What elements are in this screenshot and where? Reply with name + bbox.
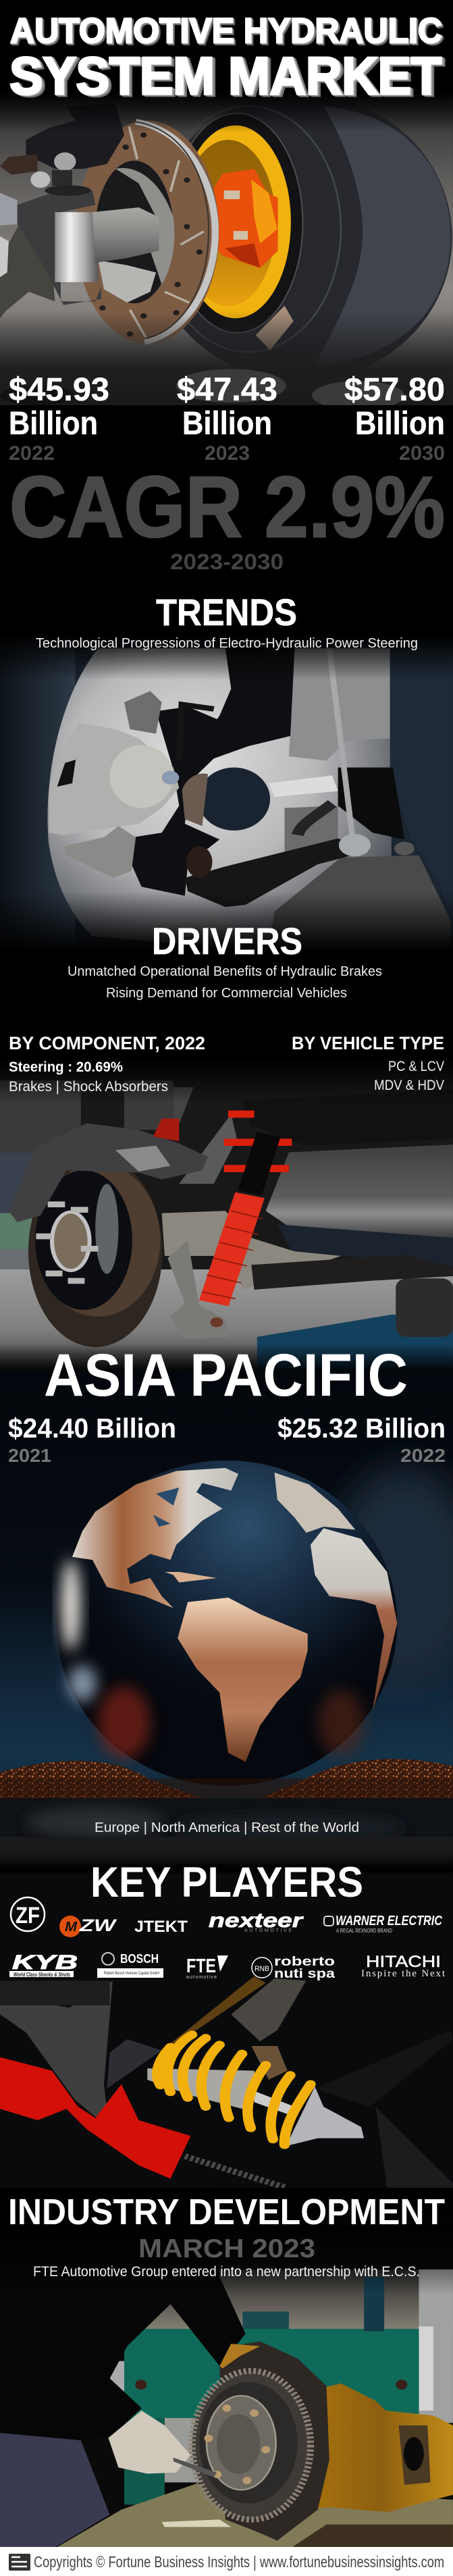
yellow diagonal panel (171, 1976, 266, 2043)
photo: front suspension (0, 635, 453, 952)
logo: KYB: KYB (12, 1951, 78, 1974)
stat: 2022 market value: Billion (9, 406, 98, 442)
worker shirt (0, 2188, 246, 2440)
by component: Steering : 20.69% (9, 1059, 123, 1075)
brake rotor (28, 1156, 162, 1347)
heading: drivers: DRIVERS (152, 920, 302, 962)
teal machine (124, 2329, 419, 2421)
upper strut (213, 648, 294, 759)
gray fairing (0, 1980, 113, 2117)
brake caliper (49, 722, 179, 835)
by component (9, 1033, 205, 1095)
logo: JTEKT: JTEKT (134, 1918, 188, 1936)
stat: 2022 asia pacific (277, 1413, 446, 1466)
stat: 2030 market value: Billion (355, 406, 445, 442)
logo: Warner Electric (324, 1914, 442, 1934)
bench (53, 2483, 453, 2549)
stat: 2030 market value: 2030 (399, 442, 445, 465)
copper glitter ground (0, 1759, 453, 1798)
hydraulic pump (307, 2384, 453, 2512)
icon: upper caliper dark mount (26, 104, 124, 169)
floor (0, 1269, 453, 1377)
stat: 2023 market value (177, 372, 277, 465)
logo: Hitachi (361, 1953, 446, 1979)
worker pants (0, 2433, 110, 2549)
globe sphere (56, 1461, 397, 1786)
photo: motorcycle yellow shock (0, 1837, 453, 2197)
logo: KYB (9, 1951, 78, 1978)
lower control arm (185, 839, 370, 907)
photo: copper globe (0, 1370, 453, 1840)
title: AUTOMOTIVE HYDRAULIC (10, 11, 442, 51)
blue box (257, 1314, 453, 1369)
logo: nexteer: AUTOMOTIVE (244, 1928, 292, 1933)
logo: FTE: FTE (186, 1955, 216, 1977)
yellow coil spring (157, 2034, 311, 2145)
axle (162, 1211, 341, 1290)
logo: nexteer: nexteer (209, 1910, 304, 1932)
stat: 2021 asia pacific: 2021 (8, 1445, 51, 1466)
CAGR period: 2023-2030 (170, 550, 284, 574)
stat: 2023 market value: $47.43 (177, 372, 277, 408)
by vehicle type: MDV & HDV (374, 1078, 444, 1093)
shock mount (231, 1978, 307, 2041)
logo: Warner Electric: A REGAL REXNORD BRAND (336, 1928, 392, 1934)
drive shaft boot (198, 768, 270, 831)
trends text: Technological Progressions of Electro-Hydraulic Power Steering (36, 636, 418, 651)
rear wheel (396, 1278, 453, 1337)
land: north america (72, 1468, 238, 1608)
logo: MZW: ZW (79, 1916, 117, 1935)
icon: rusty brake disc (76, 121, 219, 344)
drivers list: Unmatched Operational Benefits of Hydraulic Brakes (68, 964, 382, 979)
logo: ZF: ZF (16, 1903, 40, 1928)
logo: Hitachi: HITACHI (366, 1953, 441, 1971)
asphalt (271, 855, 451, 940)
title (9, 11, 442, 105)
by component: Brakes | Shock Absorbers (9, 1079, 168, 1095)
land: south america (178, 1598, 308, 1762)
logos row two (9, 1951, 446, 1981)
background below the ground (0, 1798, 453, 1840)
by vehicle type: PC & LCV (388, 1059, 444, 1074)
logo: KYB: World Class Shocks & Struts (14, 1972, 70, 1978)
logo: Hitachi: Inspire the Next (361, 1968, 446, 1979)
stat: 2023 market value: Billion (182, 406, 272, 442)
stat: 2022 asia pacific: 2022 (400, 1445, 446, 1466)
red frame (0, 2057, 190, 2179)
stat: 2030 market value: $57.80 (344, 372, 445, 408)
black knuckle (132, 707, 219, 896)
stat: 2022 market value (9, 372, 109, 465)
stat: 2021 asia pacific: $24.40 Billion (8, 1413, 176, 1444)
photo: brake and red shock absorber (0, 1058, 453, 1377)
icon: yellow rim and orange hub (197, 126, 291, 319)
by component: BY COMPONENT, 2022 (9, 1033, 205, 1053)
logo: MZW: M (65, 1920, 78, 1935)
land: africa and europe (311, 1528, 397, 1710)
heading: trends: TRENDS (156, 591, 297, 633)
footer (0, 2547, 453, 2576)
logo: MZW (59, 1916, 117, 1937)
stat: 2022 market value: 2022 (9, 442, 55, 465)
development text: FTE Automotive Group entered into a new partnership with E.C.S. (33, 2264, 420, 2280)
logo: Bosch (97, 1952, 163, 1978)
highlights (61, 1560, 364, 1759)
drivers list (68, 964, 382, 1001)
stat: 2030 market value (344, 372, 445, 465)
photo: brake disc and wheel (0, 92, 453, 410)
workshop wall (122, 2269, 453, 2334)
logo: Roberto Nuti (252, 1955, 336, 1981)
silver cylinder and rod (147, 2068, 257, 2109)
logos row one (11, 1897, 442, 1937)
icon: tyre (183, 105, 452, 363)
wheel arch light area (48, 648, 392, 952)
by vehicle type: BY VEHICLE TYPE (292, 1033, 444, 1053)
logo: FTE: automotive (186, 1975, 217, 1980)
logo: ZF (11, 1897, 45, 1931)
logo: Roberto Nuti: roberto (274, 1955, 335, 1969)
development date: MARCH 2023 (138, 2234, 315, 2263)
red coil spring (224, 1114, 292, 1169)
logo: Bosch: BOSCH (120, 1952, 159, 1966)
title: SYSTEM MARKET (9, 46, 442, 105)
logo: Roberto Nuti: nuti spa (274, 1967, 336, 1981)
black shock rod and red bellows (250, 1134, 269, 1193)
icon: Fortune Business Insights logo (9, 2554, 30, 2571)
icon: suspension arm (0, 153, 159, 318)
heading: key players: KEY PLAYERS (90, 1859, 363, 1906)
logo: Bosch: Robert Bosch Venture Capital GmbH (104, 1972, 159, 1976)
logo: Roberto Nuti: RNB (255, 1965, 269, 1973)
other regions: Europe | North America | Rest of the World (95, 1820, 359, 1835)
chain (185, 2156, 286, 2188)
photo: worker with gear (0, 2188, 453, 2549)
by vehicle type (292, 1033, 444, 1093)
heading: asia pacific: ASIA PACIFIC (44, 1341, 408, 1409)
drivers list: Rising Demand for Commercial Vehicles (106, 986, 347, 1001)
gear (192, 2371, 311, 2519)
stat: 2022 asia pacific: $25.32 Billion (277, 1413, 446, 1444)
stabiliser link rod (338, 768, 404, 839)
truck frame (241, 1089, 453, 1146)
stat: 2022 market value: $45.93 (9, 372, 109, 408)
stat: 2023 market value: 2023 (205, 442, 250, 465)
stat: 2021 asia pacific (8, 1413, 176, 1466)
gloved hand and wrench (108, 2411, 217, 2477)
brake caliper (9, 1123, 208, 1222)
